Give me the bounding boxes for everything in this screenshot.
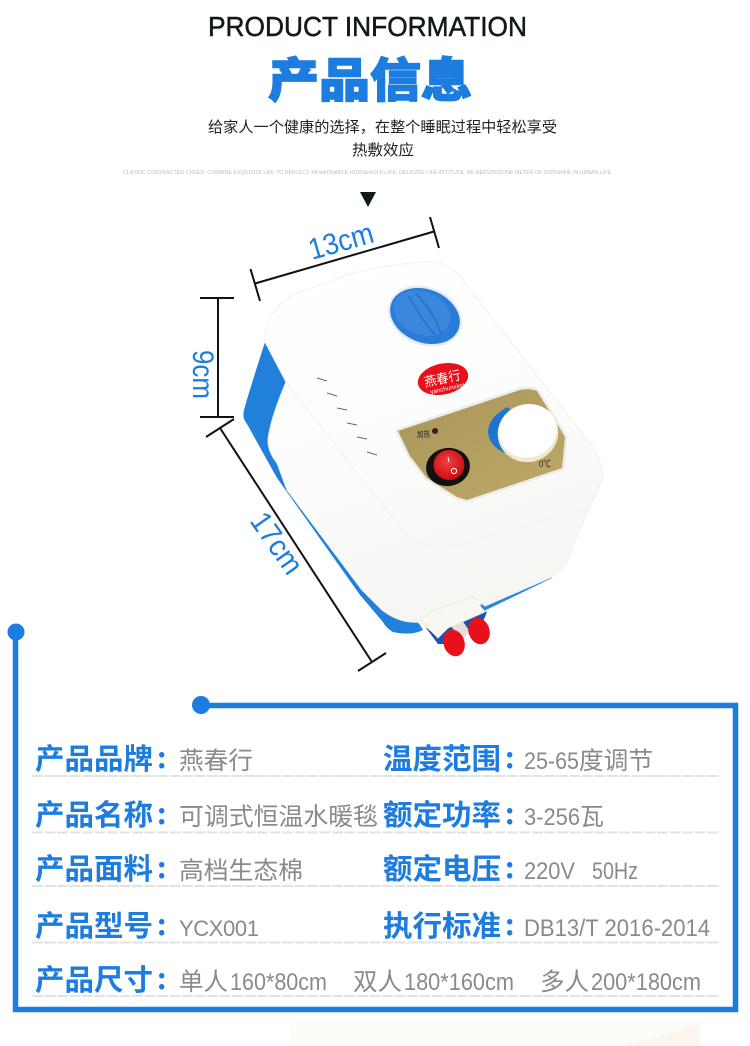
spec row 1: 温度范围 [383, 736, 501, 778]
white body [265, 262, 603, 622]
spec row 1: 25-65 [524, 748, 579, 775]
spec row 2: : [505, 791, 514, 833]
connector tab [420, 597, 485, 638]
row divider lines [32, 776, 720, 996]
gold control panel: 加热 [417, 429, 430, 439]
frame dot: left [8, 624, 24, 640]
spec row 5: 200*180cm [591, 969, 701, 996]
spec row 4: YCX001 [179, 916, 259, 941]
spec row 2: 3-256 [524, 804, 580, 831]
spec row 3: 高档生态棉 [179, 857, 303, 885]
dimension: 13cm [250, 217, 439, 301]
subtitle text [208, 119, 557, 159]
spec row 1: 燕春行 [179, 747, 253, 775]
spec row 4 [35, 902, 710, 945]
subtitle text: 热敷效应 [352, 141, 414, 159]
spec row 3: : [505, 845, 514, 887]
product: water heater device [243, 262, 603, 659]
temperature scale arc [488, 407, 518, 453]
heading: 产品信息: 产品信息 [268, 42, 472, 111]
dimension: 13cm: 13cm [305, 217, 377, 267]
spec row 4: 产品型号 [35, 903, 153, 945]
spec row 5: 180*160cm [404, 969, 514, 996]
spec row 5: : [157, 956, 166, 998]
spec row 3: 220V [524, 858, 575, 885]
small english caption: CLASSIC CONTRACTED CREED, COMBINE EXQUISITE LIFE TO REFLECT, FASHIONABLE HOUSEHOLD LIFE, DELICATE LIFE ATTITUDE, BE NERVOUSONE METER OF SUNSHINE IN URBAN LIFE [123, 170, 611, 176]
red brand badge: yanchunxing [430, 383, 465, 396]
blue casing [243, 342, 423, 634]
gold control panel [398, 389, 567, 500]
dimension: 17cm [206, 419, 386, 671]
spec row 1: : [157, 735, 166, 777]
spec row 5: 160*80cm [230, 969, 327, 996]
red brand badge: 燕春行 [423, 367, 462, 390]
spec row 4: DB13/T 2016-2014 [524, 915, 710, 942]
faint background photo strip [290, 1020, 700, 1046]
dimension: 9cm: 9cm [186, 350, 219, 399]
frame dot: top [192, 696, 210, 714]
spec row 3: 产品面料 [35, 846, 153, 888]
vent dashes [317, 378, 377, 455]
dimension: 9cm [186, 298, 234, 417]
gold control panel: 0℃ [539, 459, 551, 470]
spec row 2: 可调式恒温水暖毯 [179, 803, 378, 831]
spec row 1 [35, 735, 653, 778]
body crease [288, 384, 588, 550]
subtitle text: 给家人一个健康的选择，在整个睡眠过程中轻松享受 [208, 119, 557, 136]
red rocker switch [424, 445, 472, 489]
blue cap [379, 275, 471, 357]
spec row 5: 产品尺寸 [35, 957, 153, 999]
spec row 5 [35, 956, 701, 999]
spec row 3: : [157, 845, 166, 887]
dimension: 17cm: 17cm [243, 506, 309, 581]
spec row 2: 额定功率 [383, 792, 501, 834]
spec row 5: 双人 [353, 969, 402, 996]
spec row 2 [35, 791, 604, 834]
spec row 2: 产品名称 [35, 792, 153, 834]
spec row 3 [35, 845, 638, 888]
title: PRODUCT INFORMATION: PRODUCT INFORMATION [208, 11, 527, 42]
spec row 2: 瓦 [580, 804, 604, 831]
spec row 4: : [505, 902, 514, 944]
info frame [16, 632, 736, 1010]
white knob [489, 395, 567, 471]
red connector plugs [426, 606, 493, 659]
blue right strip [480, 575, 552, 611]
spec row 5: 多人 [540, 968, 589, 996]
red brand badge [415, 359, 471, 399]
spec row 3: 50Hz [592, 858, 638, 885]
arrow: down triangle [360, 192, 376, 207]
spec row 4: : [157, 902, 166, 944]
spec row 2: : [157, 791, 166, 833]
spec row 1: 产品品牌 [35, 736, 153, 778]
spec row 4: 执行标准 [383, 903, 501, 945]
spec row 1: 度调节 [579, 747, 653, 775]
spec row 3: 额定电压 [383, 846, 501, 888]
spec row 1: : [505, 735, 514, 777]
spec row 5: 单人 [179, 968, 228, 996]
